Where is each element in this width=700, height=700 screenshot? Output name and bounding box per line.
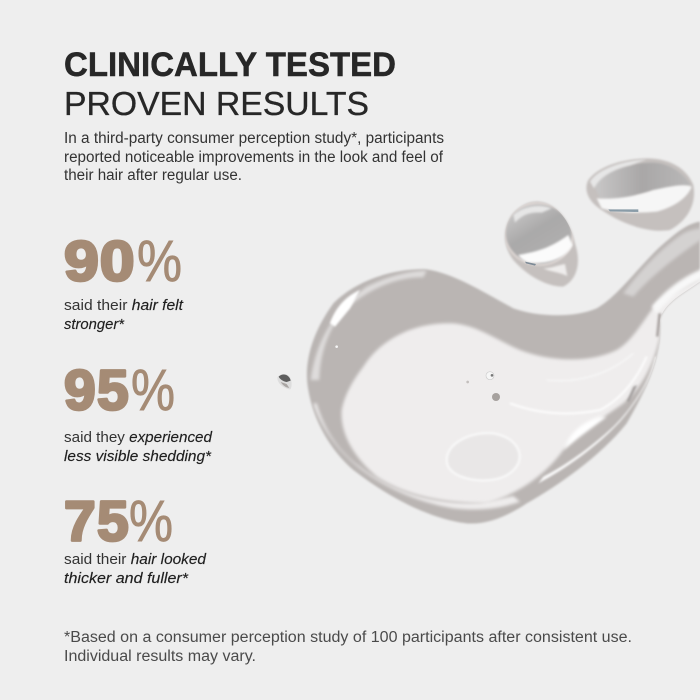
serum pool (307, 222, 700, 524)
caption: less visible shedding: said they experienced (64, 429, 213, 446)
number: 90 percent: 90 (64, 229, 135, 293)
intro text: reported noticeable improvements in the look and feel of (64, 149, 444, 166)
number: 95 percent: % (131, 358, 175, 423)
caption: hair felt stronger: said their hair felt (64, 297, 184, 314)
caption: hair looked thicker and fuller: said their hair looked (64, 551, 207, 568)
stat: 75 percent (64, 489, 207, 587)
droplet: middle (500, 198, 578, 287)
number: 75 percent: % (129, 489, 173, 554)
caption: hair looked thicker and fuller (64, 551, 207, 587)
footnote: Individual results may vary. (64, 648, 256, 665)
caption: less visible shedding (64, 429, 213, 465)
footnote (64, 629, 632, 665)
droplet: small left (277, 374, 292, 389)
number: 90 percent (64, 229, 182, 294)
title block (64, 46, 396, 122)
caption: less visible shedding: less visible shedding* (64, 448, 212, 465)
number: 75 percent: 75 (64, 490, 129, 554)
bubbles (335, 345, 500, 401)
caption: hair felt stronger: stronger* (64, 316, 125, 333)
inner ring highlight (447, 433, 520, 480)
intro text: In a third-party consumer perception study*, participants (64, 130, 444, 147)
caption: hair felt stronger (64, 297, 184, 333)
number: 75 percent (64, 489, 173, 554)
heading: proven results: PROVEN RESULTS (64, 85, 369, 122)
image: clear serum droplets (277, 158, 700, 524)
number: 90 percent: % (137, 229, 182, 294)
caption: hair looked thicker and fuller: thicker and fuller* (64, 570, 189, 587)
heading: clinically tested: CLINICALLY TESTED (64, 46, 396, 84)
stat: 90 percent (64, 229, 184, 333)
intro text (64, 130, 444, 184)
droplet: upper right (586, 158, 694, 231)
number: 95 percent: 95 (64, 358, 129, 422)
footnote: *Based on a consumer perception study of 100 participants after consistent use. (64, 629, 632, 646)
intro text: their hair after regular use. (64, 167, 242, 184)
number: 95 percent (64, 358, 175, 423)
stat: 95 percent (64, 358, 213, 465)
